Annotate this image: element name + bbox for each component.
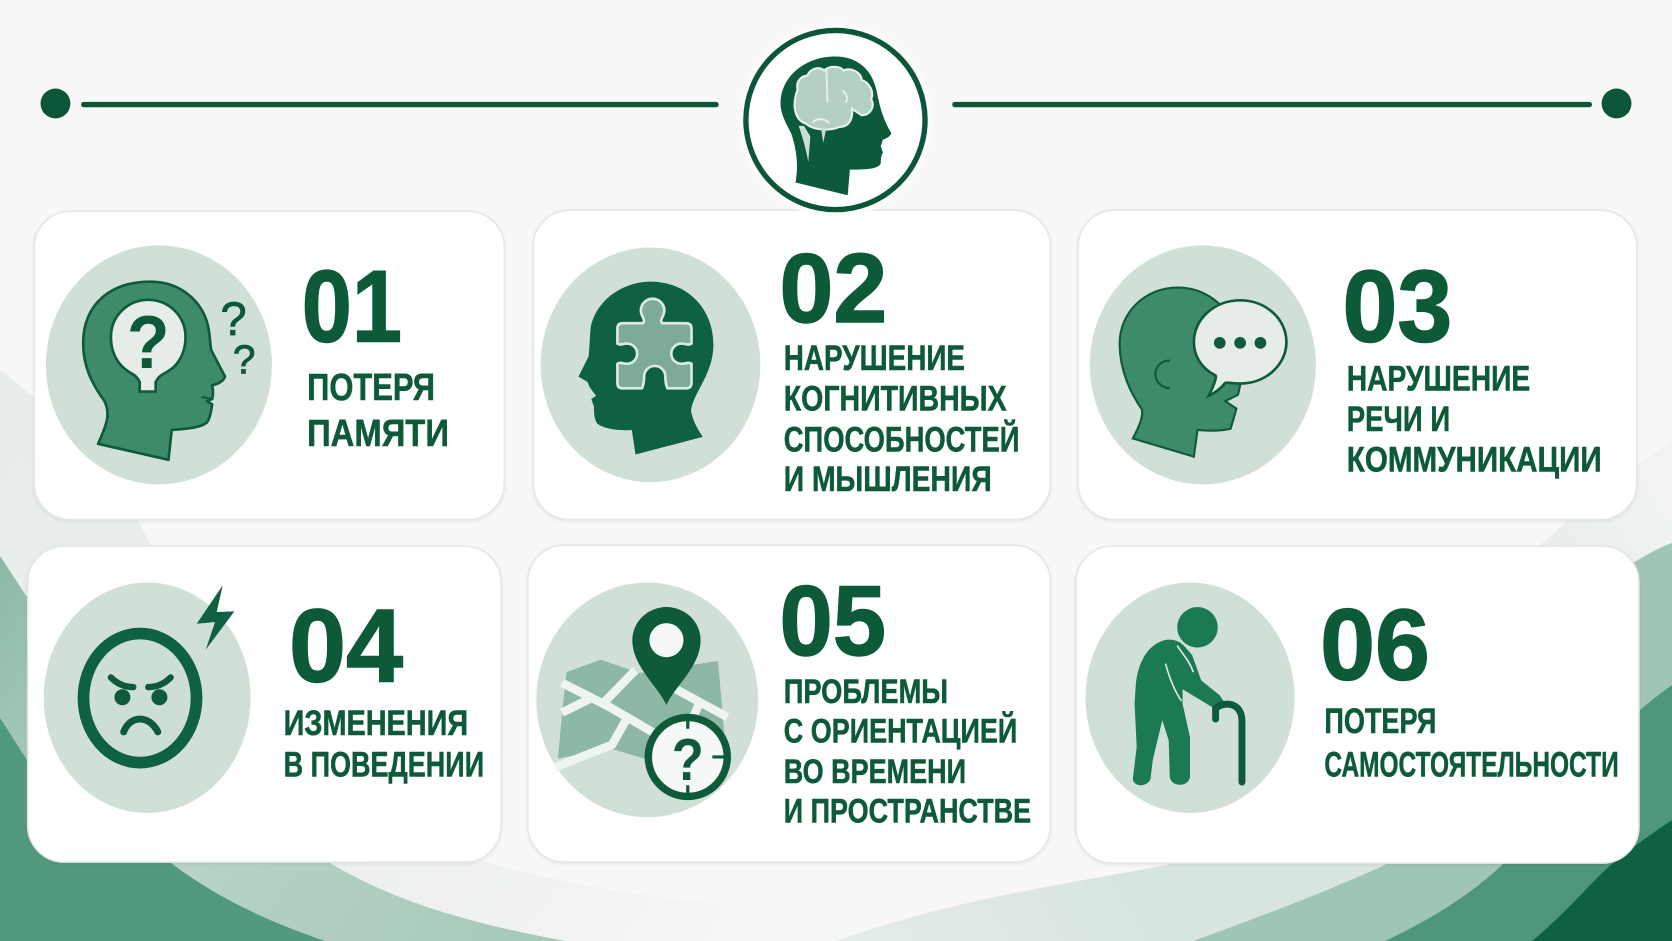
icon: head with question [83, 282, 255, 460]
icon: angry face with lightning [83, 585, 234, 763]
number 03: 03 [1343, 248, 1452, 363]
label 05: С ОРИЕНТАЦИЕЙ [784, 712, 1017, 751]
number 02: 02 [779, 233, 887, 343]
label 01: ПОТЕРЯ [307, 366, 435, 409]
number 01: 01 [302, 248, 402, 363]
header with brain icon [41, 23, 1631, 217]
label 04 [284, 704, 484, 785]
label 02 [784, 339, 1019, 499]
card 06 [1076, 546, 1639, 863]
number 04: 04 [289, 588, 403, 704]
label 01 [307, 366, 449, 455]
label 02: НАРУШЕНИЕ [784, 339, 965, 378]
label 02: СПОСОБНОСТЕЙ [784, 419, 1019, 459]
card 02 [533, 210, 1050, 520]
label 04: В ПОВЕДЕНИИ [284, 746, 484, 785]
left header line [41, 89, 719, 118]
label 03: РЕЧИ И [1347, 400, 1450, 439]
icon: head with question: ? [127, 300, 170, 384]
label 02: И МЫШЛЕНИЯ [784, 460, 992, 499]
label 03: КОММУНИКАЦИИ [1347, 441, 1602, 480]
card 04 [28, 546, 501, 862]
label 05 [784, 673, 1031, 831]
icon: head with question: ? [233, 336, 255, 382]
label 02: КОГНИТИВНЫХ [784, 380, 1007, 419]
card 03 [1078, 210, 1637, 520]
icon: head with puzzle piece [578, 282, 713, 454]
label 05: ВО ВРЕМЕНИ [784, 753, 966, 791]
right header line [952, 89, 1631, 118]
label 06: ПОТЕРЯ [1324, 702, 1436, 741]
icon: head with question: ? [220, 293, 247, 345]
card 05 [528, 545, 1050, 862]
label 03: НАРУШЕНИЕ [1347, 359, 1530, 398]
number 06: 06 [1320, 589, 1430, 702]
label 05: И ПРОСТРАНСТВЕ [784, 793, 1031, 831]
icon: map with pin and clock [556, 607, 727, 796]
icon: head with speech bubble [1120, 288, 1286, 457]
card 01 [34, 211, 504, 520]
label 03 [1347, 359, 1602, 480]
label 04: ИЗМЕНЕНИЯ [284, 704, 468, 743]
label 06 [1324, 702, 1619, 785]
icon: elderly person with cane [1133, 607, 1242, 785]
icon: map with pin and clock: ? [672, 726, 704, 793]
icon: head with brain [738, 23, 933, 217]
label 05: ПРОБЛЕМЫ [784, 673, 948, 711]
number 05: 05 [779, 566, 886, 677]
label 01: ПАМЯТИ [307, 412, 449, 455]
